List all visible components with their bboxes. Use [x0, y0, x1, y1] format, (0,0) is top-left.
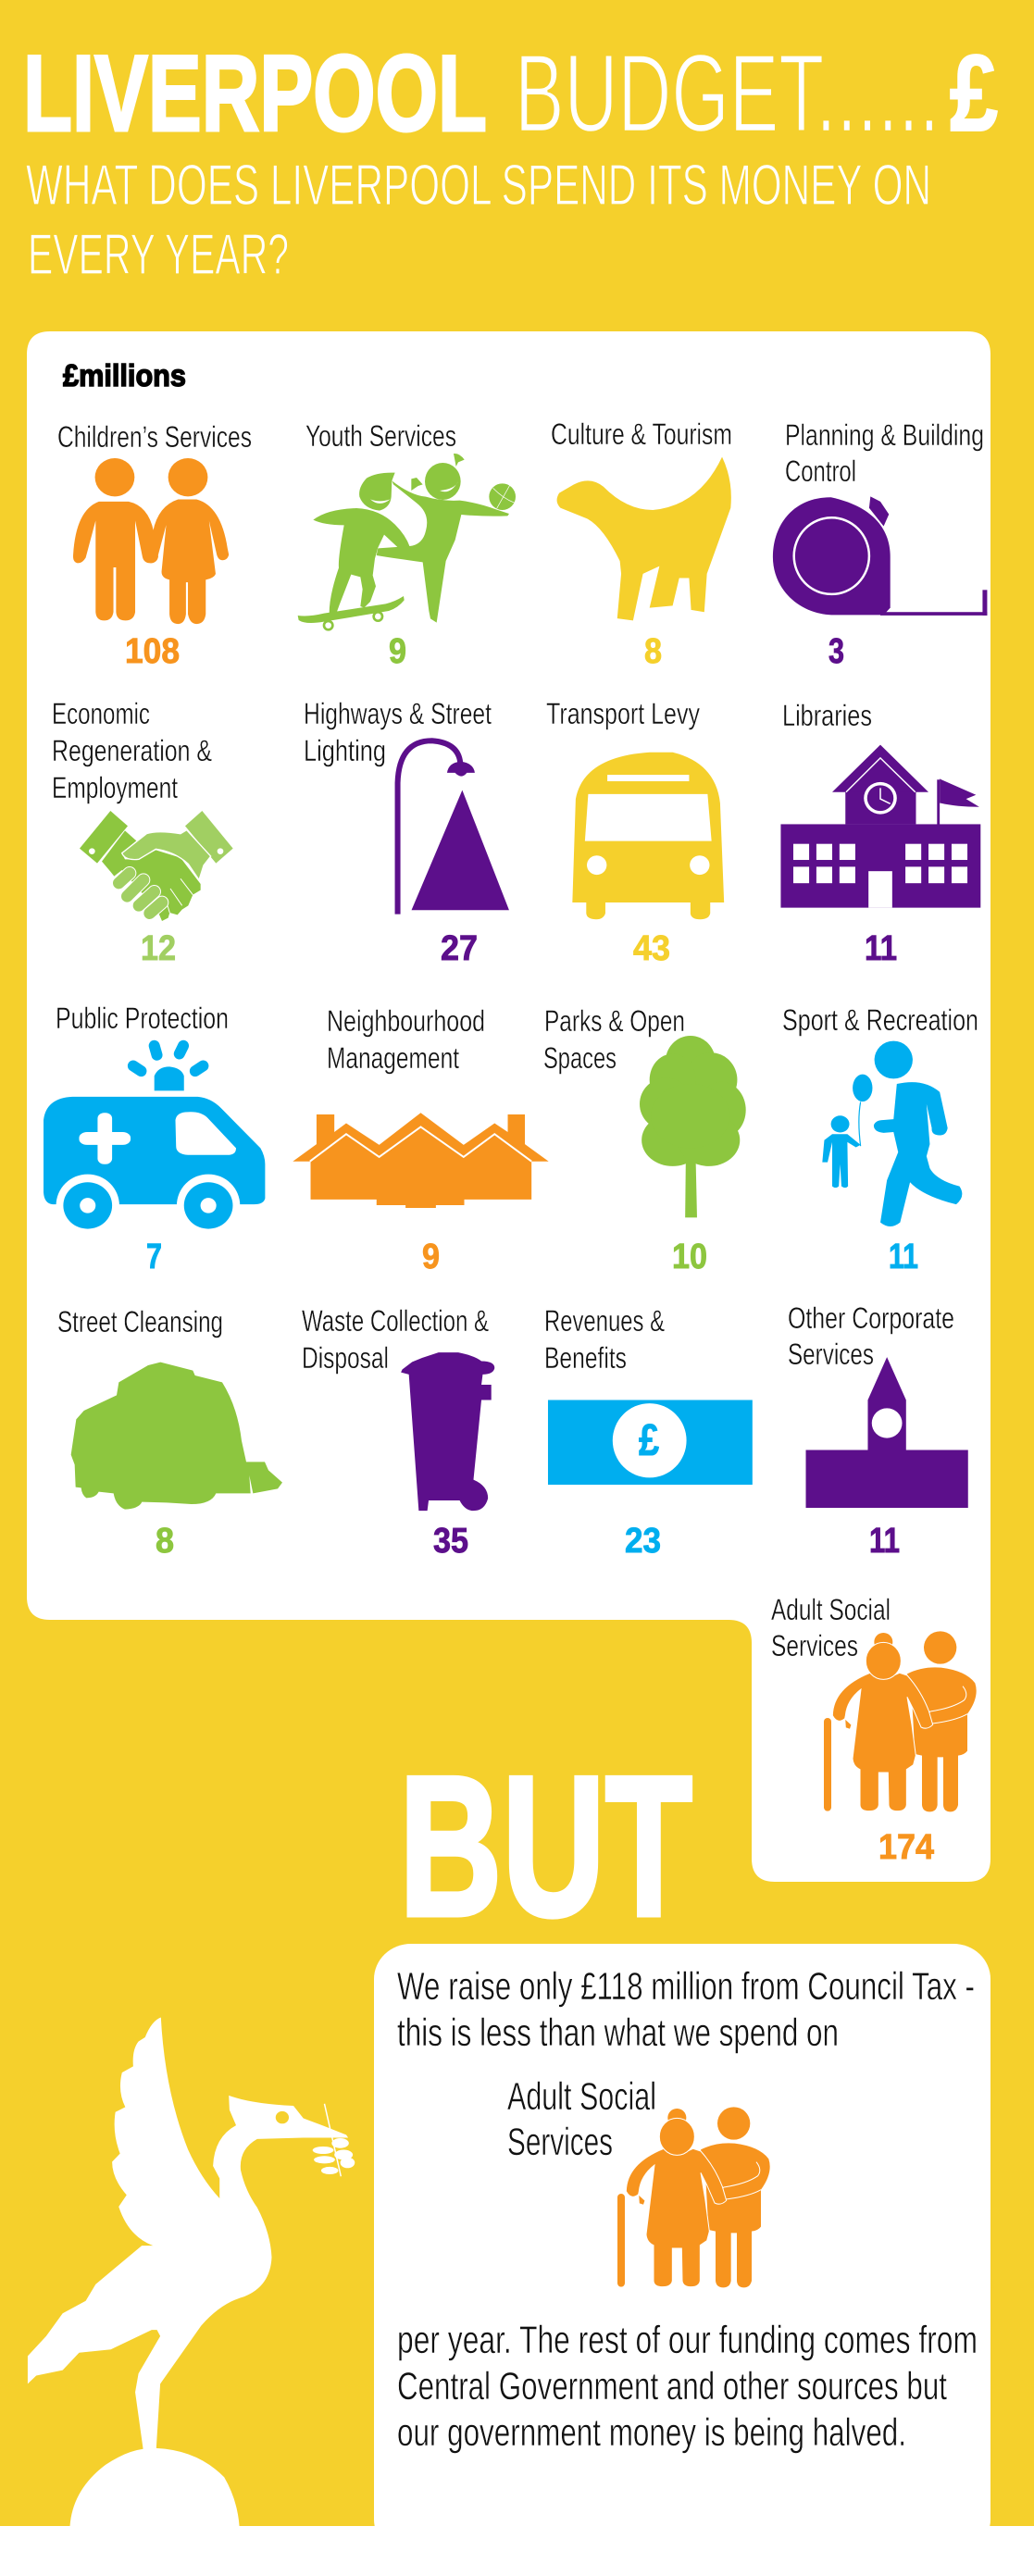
label: Adult Social Services: Adult Social	[507, 2074, 656, 2118]
item: Waste Collection & Disposal	[302, 1304, 494, 1561]
icon: tape measure	[773, 496, 987, 616]
heading: £millions: £millions	[63, 358, 186, 392]
value: 3	[828, 632, 844, 671]
icon: ambulance	[44, 1046, 265, 1237]
item: Public Protection	[44, 1002, 265, 1276]
label: Adult Social	[771, 1593, 891, 1626]
icon: liver bird	[28, 2018, 355, 2526]
icon: bus	[572, 753, 724, 919]
value: 10	[672, 1238, 707, 1276]
value: 12	[141, 929, 176, 968]
icon: town hall tower	[806, 1357, 968, 1508]
label: Other Corporate	[788, 1301, 954, 1335]
panel: spending categories	[27, 331, 990, 1882]
label: Services	[788, 1338, 874, 1371]
label	[543, 1004, 685, 1075]
value: 9	[389, 632, 406, 671]
value: 8	[156, 1522, 174, 1561]
item: Culture & Tourism	[551, 417, 732, 671]
title	[23, 31, 998, 156]
label: Waste Collection &	[302, 1304, 489, 1338]
label: Parks & Open	[544, 1004, 685, 1038]
icon: wheelie bin	[401, 1352, 494, 1511]
value: 108	[125, 632, 180, 671]
label: Regeneration &	[52, 734, 212, 767]
label: Adult Social Services	[507, 2074, 656, 2163]
icon: banknote: £	[639, 1416, 659, 1465]
item: Children's Services	[57, 420, 252, 671]
label: Culture & Tourism	[551, 417, 732, 451]
item: Neighbourhood Management	[293, 1004, 549, 1276]
label: Neighbourhood	[327, 1004, 485, 1038]
icon: street sweeper	[71, 1363, 282, 1510]
value: 35	[433, 1522, 468, 1561]
icon: elderly couple	[828, 1631, 977, 1811]
value: 11	[869, 1522, 900, 1561]
label	[771, 1593, 891, 1662]
icon: tree	[640, 1036, 746, 1217]
item: Parks & Open Spaces	[543, 1004, 746, 1276]
icon: banknote	[548, 1400, 753, 1485]
item: Transport Levy	[546, 697, 724, 968]
label: Public Protection	[56, 1002, 229, 1035]
value: 23	[625, 1522, 661, 1561]
value: 7	[146, 1238, 162, 1276]
item: Youth Services	[298, 419, 516, 671]
title: LIVERPOOL	[23, 32, 487, 154]
label	[788, 1301, 954, 1371]
text: funding explanation	[397, 2318, 978, 2454]
label: Benefits	[544, 1341, 627, 1375]
icon: children on skateboard	[298, 454, 516, 629]
item: Sport & Recreation	[782, 1003, 978, 1276]
item: Planning & Building Control	[773, 418, 987, 671]
heading: BUT: BUT	[399, 1734, 692, 1958]
icon: two children	[73, 458, 229, 624]
subtitle	[26, 154, 931, 287]
value: 8	[644, 632, 662, 671]
item: Highways & Street Lighting	[304, 697, 509, 968]
value: 11	[889, 1238, 918, 1276]
label: Street Cleansing	[57, 1305, 223, 1338]
label: Adult Social Services: Services	[507, 2120, 613, 2163]
icon: library building	[780, 745, 980, 908]
label: Employment	[52, 771, 178, 804]
label: Highways & Street	[304, 697, 492, 730]
label: Youth Services	[305, 419, 456, 453]
icon: handshake	[80, 811, 233, 921]
item: Other Corporate Services	[788, 1301, 968, 1561]
label: Control	[785, 454, 856, 488]
icon: superlambanana	[557, 457, 731, 620]
text: council tax intro: this is less than what we spend on	[397, 2010, 839, 2054]
label	[52, 697, 212, 804]
label	[785, 418, 984, 488]
value: 9	[422, 1238, 440, 1276]
label: Economic	[52, 697, 150, 730]
icon: elderly couple	[621, 2107, 770, 2287]
label: Children’s Services	[57, 420, 252, 454]
text: council tax intro	[397, 1964, 975, 2054]
title: £	[950, 32, 998, 154]
label: Spaces	[543, 1041, 617, 1075]
value: 43	[633, 929, 670, 968]
label: Management	[327, 1041, 459, 1075]
subtitle: EVERY YEAR?	[28, 223, 289, 287]
value: 174	[878, 1828, 934, 1867]
item: Revenues & Benefits	[544, 1304, 753, 1561]
label	[544, 1304, 665, 1375]
value: 27	[441, 929, 478, 968]
item: Economic Regeneration & Employment	[52, 697, 233, 968]
label	[327, 1004, 485, 1075]
label	[304, 697, 492, 767]
label: Libraries	[782, 699, 872, 732]
label: Revenues &	[544, 1304, 665, 1338]
item: Adult Social Services	[771, 1593, 977, 1867]
panel: council tax	[374, 1944, 990, 2555]
label: Transport Levy	[546, 697, 700, 730]
label: Disposal	[302, 1341, 389, 1375]
icon: adult and child with balloon	[822, 1041, 962, 1226]
value: 11	[865, 929, 897, 968]
item: Street Cleansing	[57, 1305, 282, 1561]
icon: street lamp	[398, 740, 509, 915]
label: Lighting	[304, 734, 386, 767]
item: Libraries	[780, 699, 980, 968]
label: Services	[771, 1629, 858, 1662]
icon: houses	[293, 1113, 549, 1208]
label: Sport & Recreation	[782, 1003, 978, 1037]
label	[302, 1304, 489, 1375]
